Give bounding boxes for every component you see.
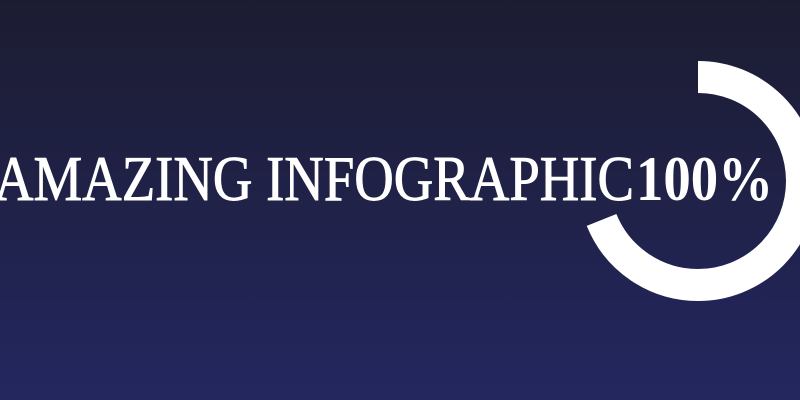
percentage label: 100% [636,144,773,214]
title: AMAZING INFOGRAPHIC [0,144,634,214]
progress ring [594,77,800,285]
